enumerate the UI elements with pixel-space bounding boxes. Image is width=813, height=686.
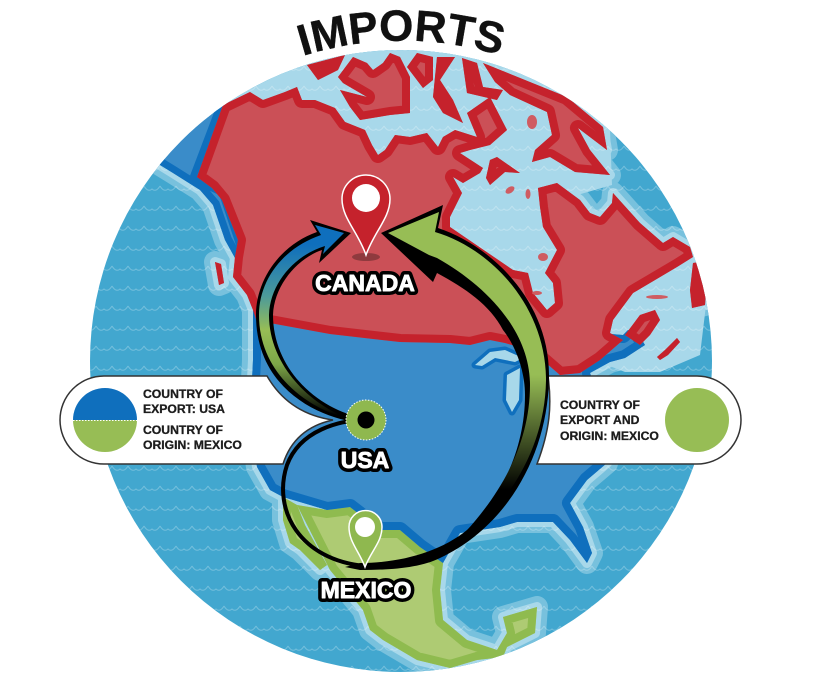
legend pill: left	[60, 376, 333, 464]
label: Canada: CANADA	[315, 270, 415, 296]
label: USA: USA	[341, 447, 389, 473]
arctic, Hudson Bay and Gulf of St Lawrence water	[240, 40, 706, 372]
legend text: left: ORIGIN: MEXICO	[143, 438, 242, 452]
globe map	[80, 40, 720, 680]
label: Canada: CANADA	[315, 270, 415, 296]
legend text: right: ORIGIN: MEXICO	[560, 429, 659, 443]
wave texture	[80, 40, 720, 680]
pin: Mexico	[349, 510, 382, 567]
legend pill: right	[537, 376, 741, 464]
land: Mexico	[283, 497, 537, 668]
coastal light band	[150, 53, 706, 668]
land: USA	[250, 305, 645, 563]
great lakes	[475, 350, 523, 412]
legend swatch: export and origin Mexico	[665, 388, 729, 452]
coastal shallows	[150, 53, 706, 668]
label: Mexico: MEXICO	[321, 577, 411, 603]
title	[296, 10, 504, 56]
arrow: Mexico origin via USA to Canada	[283, 205, 549, 570]
pin: Canada	[342, 175, 390, 261]
legend text: left: EXPORT: USA	[143, 402, 225, 416]
legend text: right: EXPORT AND	[560, 413, 640, 427]
marker: USA	[346, 400, 386, 440]
legend text: right	[560, 398, 659, 443]
small Hudson Bay islands	[504, 115, 668, 299]
legend text: left	[143, 387, 242, 452]
label: Mexico: MEXICO	[321, 577, 411, 603]
ocean	[80, 40, 720, 680]
legend swatch: export USA / origin Mexico	[73, 388, 137, 452]
title: IMPORTS	[296, 10, 504, 56]
arrow: USA export to Canada	[256, 220, 366, 423]
label: USA: USA	[341, 447, 389, 473]
legend text: right: COUNTRY OF	[560, 398, 640, 412]
land: Alaska	[160, 105, 238, 258]
legend text: left: COUNTRY OF	[143, 423, 223, 437]
legend text: left: COUNTRY OF	[143, 387, 223, 401]
land: Canada	[197, 53, 706, 375]
